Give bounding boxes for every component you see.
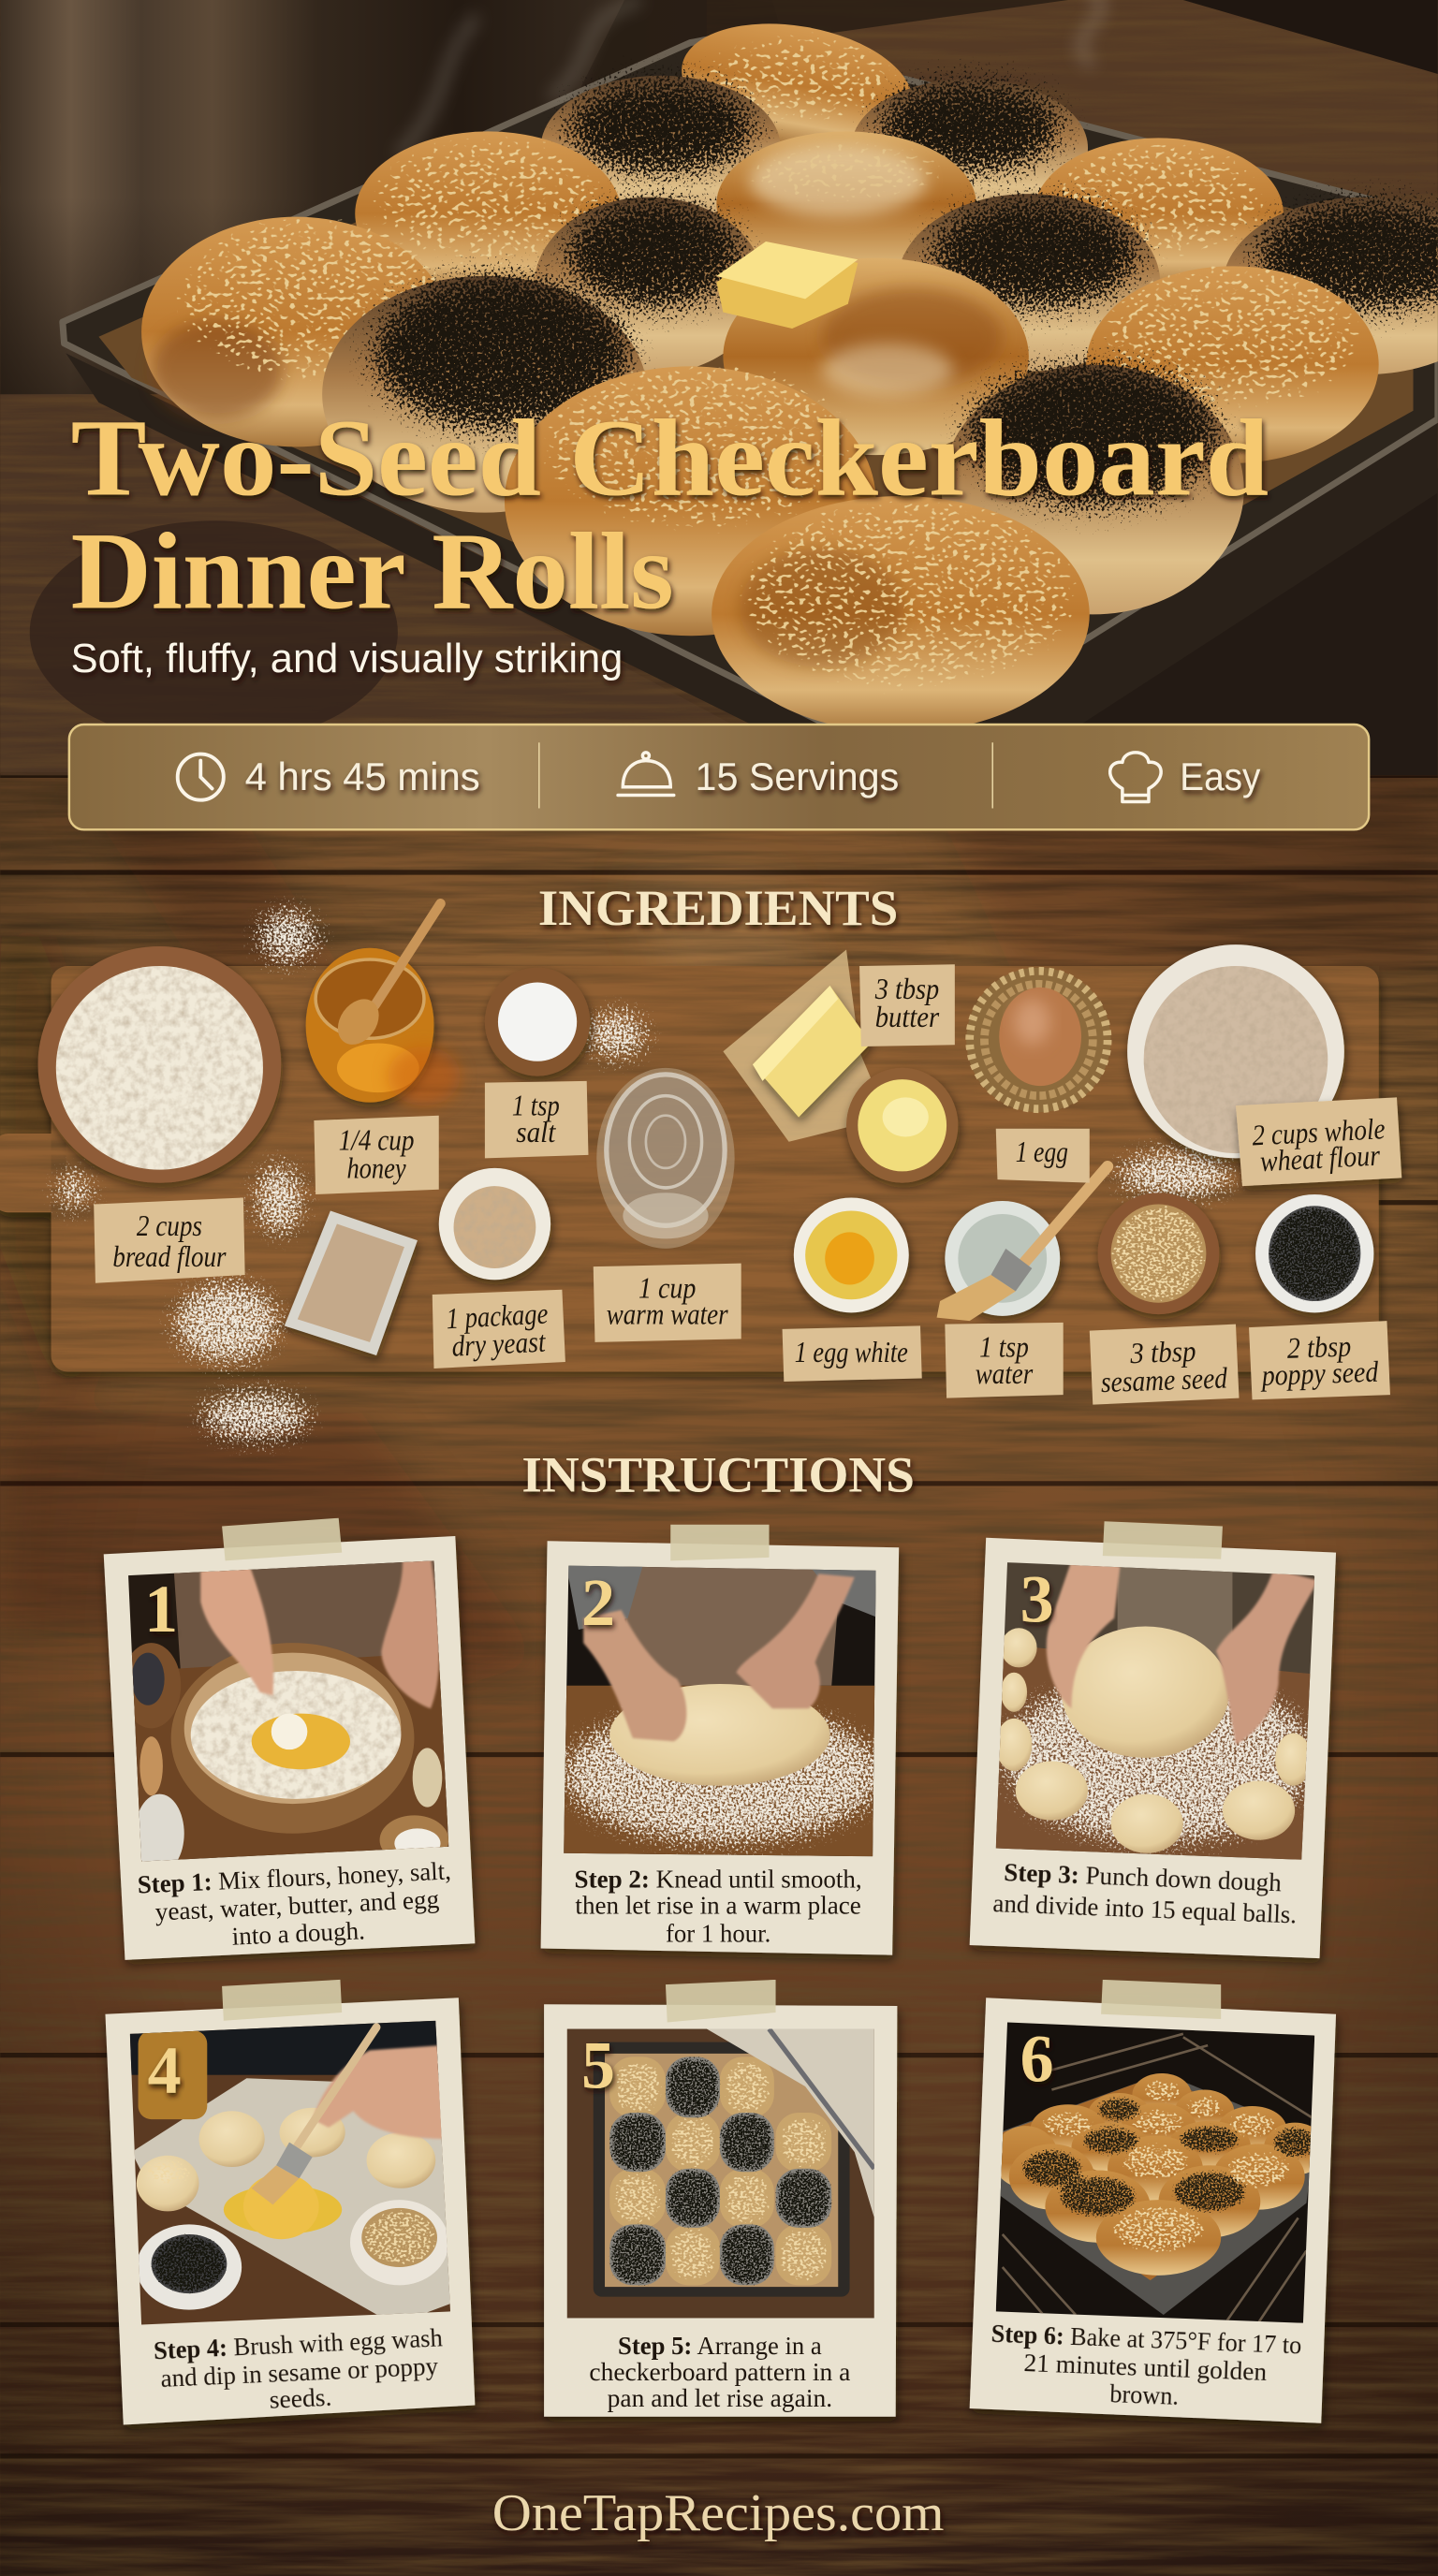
step number 4: 4 <box>148 2033 182 2108</box>
step number 5: 5 <box>581 2028 615 2103</box>
label: honey: 1/4 cup <box>339 1124 414 1157</box>
label: warm water: warm water <box>607 1298 728 1331</box>
cutting board <box>0 966 1379 1372</box>
poppy seed bowl <box>1255 1194 1373 1312</box>
step 6 text: brown. <box>1109 2379 1180 2410</box>
step 1 text: into a dough. <box>231 1916 365 1951</box>
servings: 15 Servings <box>696 754 899 798</box>
sesame seed bowl <box>1098 1193 1219 1314</box>
step number 3: 3 <box>1020 1561 1054 1636</box>
title: Two-Seed Checkerboard <box>71 397 1269 519</box>
softened butter bowl <box>846 1068 958 1183</box>
step 2 text: then let rise in a warm place <box>575 1892 861 1920</box>
prep time: 4 hrs 45 mins <box>245 754 480 798</box>
butter stick on paper <box>723 949 888 1142</box>
step 5 photo: checkerboard pan <box>567 2029 874 2318</box>
label: poppy seed: 2 tbsp <box>1286 1330 1352 1365</box>
step 6 photo: rolls baking in oven <box>986 2012 1331 2333</box>
rolls in a checkerboard <box>141 7 1438 733</box>
step 4 photo: brushing egg wash <box>115 2012 461 2333</box>
step card 5 <box>544 1980 897 2417</box>
step number 6: 6 <box>1020 2022 1054 2097</box>
label: salt <box>485 1081 588 1158</box>
step card 3 <box>970 1521 1336 1958</box>
water bowl with brush <box>937 1166 1108 1321</box>
butter pat <box>716 242 858 329</box>
tape <box>666 1980 776 2023</box>
whole wheat flour bowl <box>1127 944 1344 1158</box>
step 3 text: and divide into 15 equal balls. <box>992 1889 1298 1928</box>
pan body <box>63 35 1438 775</box>
label: poppy seed: poppy seed <box>1259 1355 1379 1392</box>
title <box>71 397 1269 632</box>
label: warm water <box>594 1264 741 1342</box>
step 5 text: checkerboard pattern in a <box>589 2358 850 2386</box>
step 6 text: Step 6: Bake at 375°F for 17 to <box>990 2320 1302 2359</box>
label: sesame seed <box>1090 1325 1239 1405</box>
label: sesame seed: 3 tbsp <box>1129 1335 1196 1369</box>
icon: serving cloche <box>618 753 674 795</box>
step 3 text <box>992 1858 1299 1928</box>
egg white bowl <box>794 1197 909 1312</box>
step card 6 <box>970 1980 1336 2423</box>
flour bowl <box>38 946 281 1183</box>
label: honey: honey <box>346 1151 406 1184</box>
hero photo of rolls in a pan <box>0 0 1438 775</box>
label: salt: salt <box>516 1116 556 1149</box>
step card 2 <box>541 1525 899 1955</box>
step card 1 <box>104 1518 475 1960</box>
label: butter: butter <box>875 1001 940 1033</box>
label: warm water: 1 cup <box>638 1272 696 1305</box>
yeast packet <box>285 1211 418 1355</box>
label: honey <box>314 1116 439 1194</box>
step 3 photo: dividing dough <box>986 1553 1331 1873</box>
label: whole wheat flour <box>1236 1097 1401 1186</box>
tape <box>1101 1980 1221 2019</box>
label: butter: 3 tbsp <box>874 973 939 1005</box>
label: bread flour: 2 cups <box>137 1209 202 1242</box>
footer website: OneTapRecipes.com <box>492 2484 944 2542</box>
label: bread flour <box>94 1197 245 1283</box>
subtitle: Soft, fluffy, and visually striking <box>71 636 623 681</box>
ingredients heading: INGREDIENTS <box>538 880 898 936</box>
step 1 photo: mixing dough in bowl <box>115 1553 461 1873</box>
label: egg <box>996 1129 1090 1183</box>
label: salt: 1 tsp <box>512 1090 560 1122</box>
label: egg: 1 egg <box>1016 1135 1068 1168</box>
step 2 text: for 1 hour. <box>666 1920 770 1948</box>
step 5 text <box>589 2332 850 2412</box>
label: water <box>945 1323 1064 1398</box>
step 5 text: pan and let rise again. <box>608 2384 832 2412</box>
step 6 text <box>989 2320 1302 2415</box>
glass of water <box>596 1068 735 1249</box>
step card 4 <box>105 1980 475 2425</box>
label: whole wheat flour: 2 cups whole <box>1252 1112 1386 1152</box>
tape <box>670 1525 770 1560</box>
icon: clock <box>178 754 224 800</box>
label: sesame seed: sesame seed <box>1100 1361 1228 1398</box>
title: Dinner Rolls <box>71 510 674 632</box>
step 4 text <box>153 2323 446 2419</box>
honey jar and dipper <box>306 903 461 1105</box>
step 3 text: Step 3: Punch down dough <box>1004 1858 1283 1896</box>
step 1 text: Step 1: Mix flours, honey, salt, <box>137 1856 451 1899</box>
label: water: water <box>976 1357 1034 1390</box>
tape <box>222 1518 342 1560</box>
step 1 text <box>137 1856 454 1954</box>
step number 2: 2 <box>581 1565 615 1640</box>
step 5 text: Step 5: Arrange in a <box>618 2332 822 2360</box>
step 4 text: Step 4: Brush with egg wash <box>153 2323 444 2364</box>
wood table background <box>0 772 1438 2576</box>
step 4 text: and dip in sesame or poppy <box>160 2351 439 2393</box>
label: water: 1 tsp <box>979 1331 1029 1364</box>
label: egg white <box>783 1325 922 1382</box>
step 6 text: 21 minutes until golden <box>1023 2349 1268 2386</box>
panel: ingredients on cutting board <box>0 900 1401 1449</box>
step 1 text: yeast, water, butter, and egg <box>154 1885 440 1926</box>
label: whole wheat flour: wheat flour <box>1259 1139 1381 1178</box>
tape <box>222 1980 342 2021</box>
label: dry yeast: 1 package <box>446 1297 549 1335</box>
label: dry yeast <box>433 1290 565 1368</box>
egg in nest <box>966 968 1111 1112</box>
instructions heading: INSTRUCTIONS <box>521 1447 915 1503</box>
difficulty: Easy <box>1180 754 1260 798</box>
label: butter <box>859 964 955 1046</box>
step 2 photo: kneading dough <box>552 1560 894 1866</box>
label: poppy seed <box>1249 1321 1390 1399</box>
flour dust <box>48 900 1244 1449</box>
step 4 text: seeds. <box>269 2383 332 2414</box>
recipe info bar <box>69 724 1369 829</box>
icon: chef hat <box>1110 753 1161 801</box>
tape <box>1103 1521 1223 1559</box>
label: egg white: 1 egg white <box>795 1336 908 1368</box>
label: dry yeast: dry yeast <box>451 1325 547 1363</box>
label: bread flour: bread flour <box>112 1240 227 1273</box>
salt bowl <box>485 968 590 1076</box>
steam wisps <box>398 0 1101 156</box>
yeast bowl <box>439 1168 550 1280</box>
step 2 text: Step 2: Knead until smooth, <box>575 1866 862 1894</box>
step number 1: 1 <box>144 1572 178 1647</box>
step 2 text <box>575 1866 862 1948</box>
